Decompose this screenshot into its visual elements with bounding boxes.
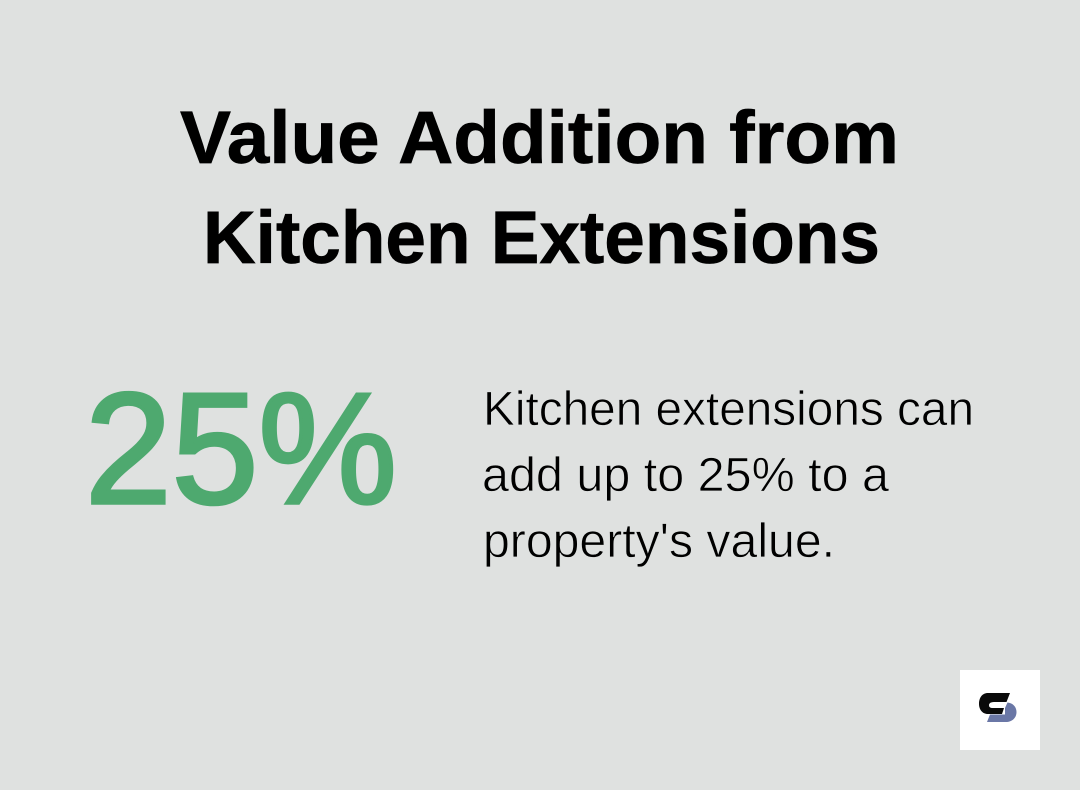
title: Value Addition from	[180, 96, 899, 179]
description text	[482, 383, 974, 568]
big stat: 25%: 25%	[85, 361, 397, 537]
icon: S logo	[979, 693, 1016, 722]
description text: add up to 25% to a	[482, 449, 889, 502]
title: Kitchen Extensions	[203, 196, 880, 279]
logo badge	[960, 670, 1040, 750]
description text: Kitchen extensions can	[483, 383, 974, 436]
title	[180, 96, 899, 279]
description text: property's value.	[483, 515, 835, 568]
